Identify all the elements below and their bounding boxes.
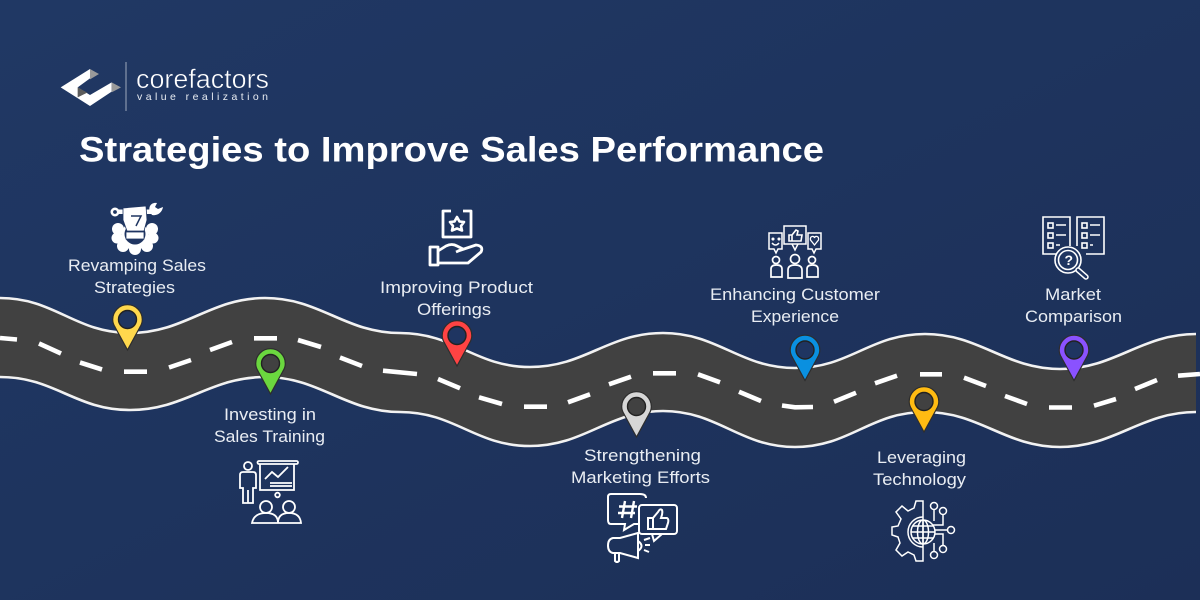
icon: presenter and audience [240,461,301,523]
pin: yellow [113,305,142,350]
hashtag glyph [618,501,637,518]
label: Improving Product Offerings [380,278,533,319]
label: Market Comparison: Comparison [1025,307,1122,326]
logo: corefactors: corefactors [136,64,269,94]
label: Investing in Sales Training [214,405,325,446]
icon: documents and magnifier [1043,217,1104,277]
pin: blue [790,335,820,380]
label: Enhancing Customer Experience [710,285,880,326]
icon: documents and magnifier: ? [1064,252,1073,268]
label: Improving Product Offerings: Improving Product [380,278,533,297]
label: Strengthening Marketing Efforts: Strengthening [584,446,701,465]
icon: hashtag, thumbs-up and megaphone [608,494,677,562]
label: Market Comparison: Market [1045,285,1101,304]
pin: purple [1059,335,1089,380]
label: Revamping Sales Strategies: Revamping Sales [68,256,206,275]
pin: green [256,349,285,394]
pin: amber [909,387,939,432]
label: Enhancing Customer Experience: Experience [751,307,839,326]
label: Leveraging Technology: Technology [873,470,967,489]
label: Enhancing Customer Experience: Enhancing Customer [710,285,880,304]
label: Improving Product Offerings: Offerings [417,300,491,319]
label: Revamping Sales Strategies: Strategies [94,278,175,297]
pin: red [442,321,472,366]
road [0,298,1200,447]
logo: corefactors: value realization [137,91,268,103]
icon: gear with globe and circuit [892,501,954,561]
logo mark [61,69,121,106]
icon: box with star on open hand [430,211,482,265]
label: Strengthening Marketing Efforts: Marketing Efforts [571,468,710,487]
label: Revamping Sales Strategies [68,256,206,297]
road centre dashes [0,338,1200,408]
icon: fist with wrench and gear [112,203,163,255]
label: Leveraging Technology: Leveraging [877,448,966,467]
icon: customers with speech bubbles [769,226,821,278]
label: Leveraging Technology [873,448,967,489]
label: Investing in Sales Training: Investing in [224,405,316,424]
label: Strengthening Marketing Efforts [571,446,710,487]
label: Investing in Sales Training: Sales Training [214,427,325,446]
logo: corefactors [61,62,269,111]
pin: grey [622,392,651,437]
title: Strategies to Improve Sales Performance [79,130,824,170]
label: Market Comparison [1025,285,1122,326]
